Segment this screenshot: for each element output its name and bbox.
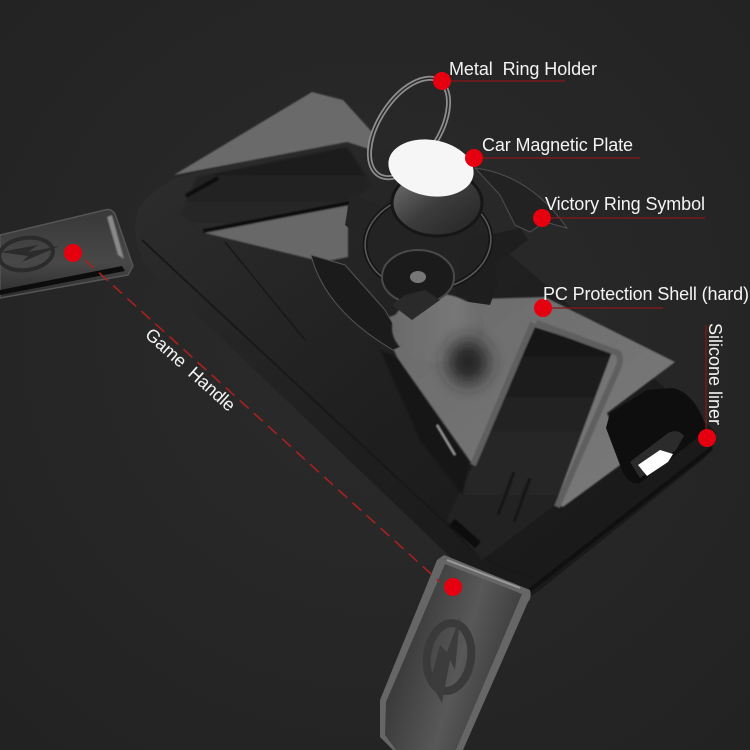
phone case body <box>135 135 716 601</box>
camera cutout: silicone liner <box>606 388 707 483</box>
shadow blur beside ring mount <box>448 340 488 384</box>
dome under the ring <box>392 294 484 362</box>
victory ring symbol: bat wings and ring <box>311 168 567 362</box>
left game handle <box>0 210 133 298</box>
icon: handle logo <box>422 617 476 703</box>
PC protection shell: lower panel <box>380 297 675 560</box>
callout: left handle dot <box>64 244 82 262</box>
callout: metal ring holder <box>433 72 565 90</box>
callout: car magnetic plate <box>465 149 640 167</box>
label: pc protection shell: PC Protection Shell (hard) <box>543 284 749 304</box>
dial <box>382 250 454 304</box>
callout: bottom handle dot <box>444 578 462 596</box>
callout: game handle dashed leader <box>85 260 440 582</box>
PC protection shell: upper panel <box>174 92 372 262</box>
bottom game handle <box>380 555 531 750</box>
label: game handle: Game Handle <box>141 324 239 415</box>
car magnetic plate: white disc <box>384 133 478 203</box>
metal ring holder <box>353 65 465 191</box>
callout: victory ring symbol <box>533 209 705 227</box>
callout: pc protection shell <box>534 299 663 317</box>
label: metal ring holder: Metal Ring Holder <box>449 59 597 79</box>
callout: silicone liner <box>698 325 716 447</box>
label: silicone liner: Silicone liner <box>705 323 725 425</box>
magnetic plate base <box>392 170 482 236</box>
label: car magnetic plate: Car Magnetic Plate <box>482 135 633 155</box>
icon: handle logo <box>0 234 55 274</box>
label: victory ring symbol: Victory Ring Symbol <box>545 194 705 214</box>
